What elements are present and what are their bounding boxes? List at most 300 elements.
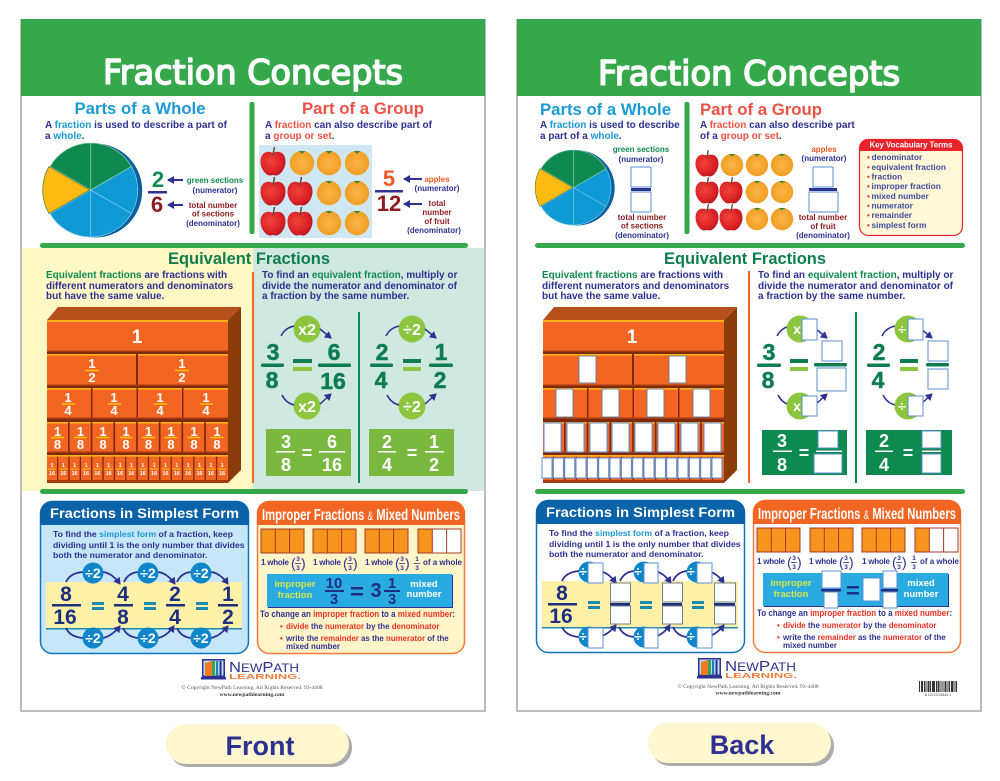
title: Fraction Concepts [598,54,900,94]
fraction chain: 8 [60,583,72,606]
vocabulary list: • [867,192,870,201]
fraction chain: 4 [169,606,181,629]
divider [40,489,468,494]
sixteenths: 16 [117,471,123,477]
panel: improper fractions and mixed numbers [257,501,465,654]
division labels: ÷2 [85,630,101,646]
conversion box with blanks [763,571,949,608]
fraction bricks: 1 [132,327,143,348]
barcode [919,686,957,697]
description: of a group or set. [700,131,782,142]
bar labels: 3 [897,555,901,562]
quarters: 4 [202,403,210,418]
fraction chain: 1 [222,583,234,606]
labels: total number [618,213,666,222]
arrows [404,179,422,204]
panel header [536,500,745,524]
panel header [257,501,465,525]
divider [250,102,254,234]
division labels: ÷2 [140,565,156,581]
halves: 1 [178,356,186,371]
fraction equations with blanks: 3 [763,339,775,365]
labels: of sections [192,210,235,218]
quarters: 4 [156,403,164,418]
fraction chain: 16 [53,606,77,629]
division circles [82,562,212,648]
bar labels: ) [902,554,907,570]
sixteenths: 16 [94,471,100,477]
bar labels: ( [787,554,792,570]
vocabulary title: Key Vocabulary Terms [870,140,953,150]
bar labels: 1 whole [809,557,838,566]
header band [517,19,981,96]
panel: improper fractions and mixed numbers [753,500,961,652]
eighths: 8 [190,437,198,452]
vocabulary list: • [867,221,870,230]
division labels [85,565,209,646]
operator labels [298,322,421,416]
result box 2/4 = 1/2: 2 [382,432,392,452]
vocabulary list: denominator [872,152,923,162]
division arrows [562,571,724,637]
labels [407,175,461,235]
result box 3/8: = [799,443,809,463]
sixteenths: 16 [106,471,112,477]
explanation: To find the simplest form of a fraction, keep [549,528,729,538]
labels: (denominator) [615,231,669,240]
eighths: 1 [145,424,152,439]
labels: (denominator) [796,231,850,240]
operator circles with blanks [786,316,923,420]
fraction 2/6: 2 [152,167,164,192]
vocabulary list: fraction [872,172,902,182]
description: A fraction can also describe part of [265,120,432,131]
vocabulary list: equivalent fraction [872,162,946,172]
panel: back poster frame [517,20,981,711]
bullets: write the remainder as the numerator of the [285,634,449,643]
bullets [280,622,449,651]
conversion box: 3 [370,580,382,602]
section divider [40,243,468,248]
division labels: ÷2 [193,565,209,581]
bar labels: 1 whole [261,558,290,567]
labels: (numerator) [802,154,847,163]
logo: NewPath Learning [201,659,301,681]
result box 3/8 = 6/16 [266,429,351,476]
labels: number [422,208,452,217]
conversion box with blanks: improper [770,578,812,589]
division circles with blanks: ÷ [634,628,642,644]
sixteenths: 1 [198,463,201,469]
sixteenths: 16 [151,471,157,477]
panel title: Fractions in Simplest Form [50,505,239,521]
panel: parts of a whole [535,100,680,240]
operator labels: x2 [298,322,316,339]
curved arrows [281,326,436,405]
conversion box: 10 [326,575,342,592]
result box 2/4: 4 [879,455,889,475]
header band [21,19,485,96]
labels: of fruit [810,222,836,231]
fraction equations with blanks [757,339,949,393]
panel: part of a group [696,100,855,240]
blank boxes [542,356,722,478]
result box 3/8 = 6/16: 8 [281,455,291,475]
labels: of fruit [424,217,450,226]
conversion box: fraction [278,590,313,601]
panel: parts of a whole [43,99,244,238]
division circles with blanks [578,562,712,648]
bullets [777,621,946,650]
fraction 5/12: 12 [377,191,401,216]
halves [85,356,189,385]
vocabulary list: • [867,202,870,210]
divider [684,102,690,234]
button: Back [648,723,834,766]
fruit grid [259,145,372,238]
method text: divide the numerator and denominator of [758,281,954,292]
panel: equivalent fractions [542,250,954,483]
division circles with blanks: ÷ [634,563,642,579]
sixteenths: 16 [208,471,214,477]
bar labels: 3 [792,555,796,562]
fraction bars [757,528,958,552]
quarters: 1 [202,390,210,405]
sixteenths: 16 [140,471,146,477]
title: Fraction Concepts [103,53,403,93]
instructions: To change an improper fraction to a mixed number: [757,608,952,618]
sixteenths: 16 [128,471,134,477]
explanation: To find the simplest form of a fraction, keep [53,529,233,539]
result box 2/4 = 1/2: 4 [382,455,392,475]
orange divider [252,272,254,483]
sixteenths: 16 [60,471,66,477]
bar labels: 3 [400,565,404,572]
sixteenths: 1 [141,463,144,469]
sixteenths: 16 [83,471,89,477]
bar labels: ( [839,554,844,570]
green divider [358,312,360,483]
labels [186,176,244,228]
definition text: different numerators and denominators [542,281,730,292]
bar labels: of a whole [920,557,960,566]
fraction bricks with blanks: 1 [627,327,638,348]
fraction bars [261,529,461,553]
fraction bricks [47,307,241,483]
bar labels: 1 [415,556,419,563]
description: A fraction is used to describe a part of [45,120,227,131]
heading: Equivalent Fractions [664,250,826,268]
fraction chain: 2 [222,606,234,629]
fraction equations: 4 [375,367,388,393]
sixteenths: 1 [119,463,122,469]
logo: NewPath Learning [697,658,797,680]
divider [535,243,965,248]
conversion box: mixed [410,579,438,590]
result box 2/4: 2 [879,431,889,451]
orange divider [748,271,750,483]
fruit grid [696,150,793,230]
bullets: divide the numerator by the denominator [783,621,936,630]
logo: NewPath Learning: LEARNING. [229,674,301,681]
result box 3/8 = 6/16: 16 [322,455,342,475]
panel: fractions in simplest form [40,501,249,654]
explanation: dividing until 1 is the only number that divides [549,539,741,549]
copyright: © Copyright NewPath Learning. All Rights Reserved. 93-4408 [181,684,323,691]
bar labels: ( [395,555,400,571]
result box 3/8 [762,430,847,475]
labels: (numerator) [415,184,460,193]
divider [535,489,965,494]
bar labels [757,554,960,571]
eighths: 1 [190,424,198,439]
vocabulary list: • [867,163,870,172]
sixteenths: 1 [50,463,54,469]
labels: total number [189,201,237,210]
vocabulary list: numerator [872,200,914,210]
heading: Equivalent Fractions [168,250,330,268]
labels: total number [799,213,847,222]
fraction chain: 2 [169,583,181,606]
result box 3/8 = 6/16: 3 [281,432,291,452]
bullets: write the remainder as the numerator of the [782,633,946,642]
copyright: www.newpathlearning.com [716,690,781,696]
description: a part of a whole. [540,131,622,142]
quarters: 4 [110,403,118,418]
definition text: Equivalent fractions are fractions with [542,270,723,281]
button: Front: Front [226,731,294,761]
division labels: ÷2 [193,630,209,646]
bar labels: 3 [296,565,300,572]
bar labels: 1 whole [365,558,394,567]
vocabulary list: remainder [872,210,913,220]
sixteenths: 16 [174,471,180,477]
bar labels: 3 [400,556,404,563]
eighths: 8 [167,437,175,452]
quarters: 1 [110,390,118,405]
description: a whole. [45,131,84,142]
conversion box with blanks: number [904,589,939,600]
panel title: Improper Fractions & Mixed Numbers [262,507,460,524]
panel title: Improper Fractions & Mixed Numbers [758,506,956,523]
arrows [168,180,183,205]
yellow band [542,581,738,628]
sixteenths: 1 [153,463,156,469]
operator labels: x2 [298,399,316,416]
operator labels: ÷2 [403,322,421,339]
heading: Part of a Group [302,99,424,118]
explanation: both the numerator and denominator. [53,550,207,560]
quarters: 1 [156,390,164,405]
vocabulary header [859,139,963,151]
definition text: but have the same value. [542,291,661,302]
fraction chain with blanks [548,582,736,628]
button: Front [166,724,352,767]
eighths: 1 [99,424,107,439]
pie chart [43,143,142,238]
eighths: 8 [145,437,152,452]
panel: part of a group [259,99,461,238]
description: A fraction is used to describe [540,120,680,131]
bar labels: ) [353,555,358,571]
copyright: © Copyright NewPath Learning. All Rights Reserved. 93-4408 [677,683,819,690]
result box 3/8: 3 [777,431,787,451]
method text: divide the numerator and denominator of [262,281,458,292]
heading: Parts of a Whole [74,99,206,118]
conversion box [267,574,453,608]
copyright: www.newpathlearning.com [220,692,285,698]
division labels: ÷2 [140,630,156,646]
fraction equations [261,339,453,394]
labels: green sections [187,176,244,185]
green divider [855,312,857,483]
description: A fraction can also describe part [700,120,855,131]
instructions: To change an improper fraction to a mixed number: [260,609,455,619]
result box 2/4 = 1/2: 2 [429,455,439,475]
sixteenths: 1 [209,463,212,469]
operator labels: ÷2 [403,399,421,416]
sixteenths: 1 [175,463,178,469]
fraction equations: 1 [435,339,448,365]
sixteenths: 1 [96,463,99,469]
division circles with blanks: ÷ [579,628,587,644]
result box 2/4 = 1/2 [369,429,454,476]
bar labels: ) [797,554,802,570]
panel: front poster [21,19,485,698]
fraction equations: 6 [328,339,340,365]
bar labels: 3 [844,555,848,562]
eighths: 1 [77,424,84,439]
bullets: • [777,633,780,642]
fraction chain with blanks: 8 [556,582,568,605]
sixteenths: 16 [162,471,169,477]
panel header [40,501,249,525]
vocabulary list: • [867,153,870,162]
eighths: 8 [99,437,107,452]
conversion box: 3 [330,591,338,608]
sixteenths: 1 [84,463,88,469]
fraction chain with blanks: 16 [549,605,573,628]
conversion box: improper [274,579,316,590]
panel: back poster [517,19,981,697]
fraction chain: 4 [117,583,129,606]
panel title: Fractions in Simplest Form [546,504,735,520]
bullets: divide the numerator by the denominator [286,622,440,631]
definition text: Equivalent fractions are fractions with [46,270,227,281]
bar labels: 1 whole [862,557,891,566]
sixteenths: 1 [130,463,133,469]
bar labels: ) [849,554,854,570]
heading: Part of a Group [700,100,822,119]
pie chart [535,150,615,226]
conversion box: 3 [388,591,396,608]
vocabulary list: simplest form [872,220,926,230]
bar labels: 3 [296,556,300,563]
method text: To find an equivalent fraction, multiply or [262,270,457,281]
division arrows [66,572,228,638]
sixteenths: 16 [72,471,78,477]
fraction bricks with blanks [542,307,737,483]
bar labels: 3 [792,564,796,571]
bar labels: ( [343,555,348,571]
background right [253,248,484,491]
operator circles with blanks: x [793,321,801,337]
operator circles with blanks: ÷ [898,321,906,337]
labels: (denominator) [407,226,461,235]
blank fraction [809,167,838,212]
eighths: 1 [167,424,175,439]
fraction chain: 8 [117,606,129,629]
bullets: • [777,621,780,630]
blank fraction [631,167,651,212]
sixteenths: 16 [219,471,225,477]
fraction chain [52,583,238,629]
sixteenths: 16 [49,471,55,477]
labels: of sections [621,222,664,230]
halves: 2 [178,370,186,385]
definition text: but have the same value. [46,291,165,302]
labels: (denominator) [186,219,240,228]
result box 2/4 = 1/2: 1 [429,432,439,452]
labels: (numerator) [193,186,238,195]
vocabulary list: • [867,182,870,191]
bar labels: 3 [348,556,352,563]
vocabulary list: • [867,172,870,182]
result box 3/8 = 6/16: 6 [327,432,337,452]
vocabulary list: mixed number [872,191,929,201]
logo: NewPath Learning: NEWPATH [725,658,796,675]
bar labels: ( [291,555,296,571]
bar labels [261,555,463,572]
bullets: • [280,634,283,643]
vocabulary list: improper fraction [872,181,941,191]
bullets: mixed number [286,642,340,651]
bullets: • [280,622,283,631]
bar labels: 3 [348,565,352,572]
operator circles [294,316,426,420]
bar labels: 1 whole [757,557,786,566]
conversion box with blanks: mixed [907,578,935,589]
bar labels: 3 [844,564,848,571]
panel: key vocabulary terms [859,139,963,236]
division circles with blanks: ÷ [579,563,587,579]
logo: NewPath Learning: NEWPATH [229,659,299,676]
fraction 5/12: 5 [383,166,395,191]
fraction equations: 2 [434,367,446,393]
labels: green sections [613,145,670,154]
button: Back: Back [710,730,775,760]
bar labels: 3 [897,564,901,571]
result box 3/8 = 6/16: = [302,443,312,463]
eighths: 8 [213,437,221,452]
explanation: both the numerator and denominator. [549,549,703,559]
eighths: 8 [54,437,61,452]
fraction 2/6: 6 [151,192,163,217]
method text: a fraction by the same number. [758,291,905,302]
eighths: 1 [213,424,221,439]
sixteenths: 1 [164,463,167,469]
sixteenths: 1 [62,463,65,469]
method text: To find an equivalent fraction, multiply or [758,270,953,281]
bar labels: 3 [415,565,419,572]
bar labels: 1 whole [313,558,342,567]
fraction equations: 8 [266,367,279,393]
eighths [51,424,224,452]
labels [613,145,670,240]
result box 2/4: = [903,443,913,463]
fraction 5/12 [375,166,403,216]
quarters: 4 [64,403,72,418]
